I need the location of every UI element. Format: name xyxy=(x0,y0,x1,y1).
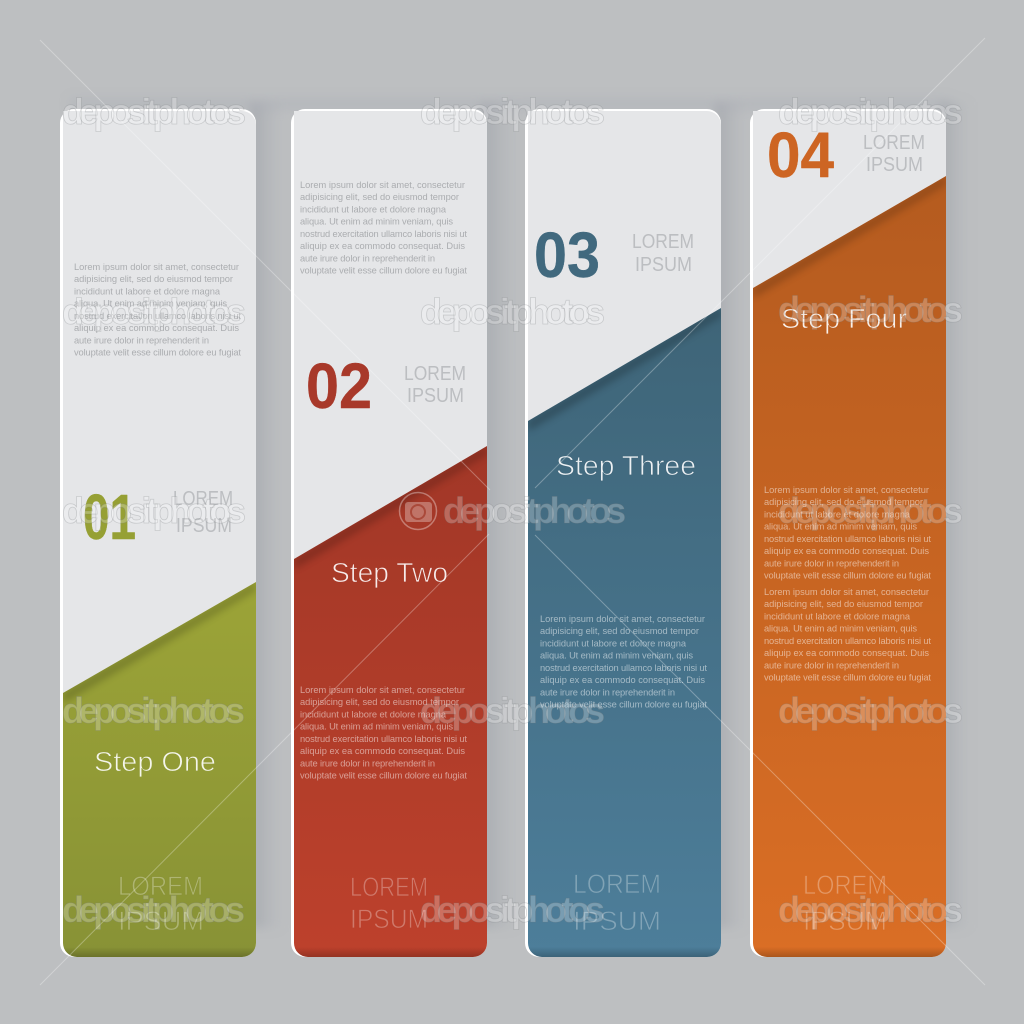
text block: step three: nostrud exercitation ullamco laboris nisi ut xyxy=(540,663,707,673)
footer label: step three xyxy=(573,869,661,936)
label: lorem ipsum: LOREM xyxy=(173,488,233,510)
watermark: depositphotos xyxy=(62,490,246,531)
text block: step four upper: voluptate velit esse cillum dolore eu fugiat xyxy=(764,571,931,581)
watermark: depositphotos xyxy=(778,490,963,531)
label: lorem ipsum: LOREM xyxy=(632,231,694,253)
panel: step four xyxy=(750,109,946,957)
icon: watermark camera xyxy=(400,492,436,530)
text block: step two bottom: incididunt ut labore et dolore magna xyxy=(300,710,447,720)
text block: step two bottom: Lorem ipsum dolor sit amet, consectetur xyxy=(300,685,465,695)
text block: step two bottom: voluptate velit esse cillum dolore eu fugiat xyxy=(300,771,467,781)
label: lorem ipsum: IPSUM xyxy=(407,385,464,407)
label: lorem ipsum: IPSUM xyxy=(635,254,692,276)
footer label: step three: LOREM xyxy=(573,869,661,899)
heading: step three: Step Three xyxy=(556,450,696,481)
text block: step one: aute irure dolor in reprehenderit in xyxy=(74,336,209,346)
text block: step three: aute irure dolor in reprehenderit in xyxy=(540,688,675,698)
footer label: step one xyxy=(118,871,204,936)
text block: step four lower: aute irure dolor in reprehenderit in xyxy=(764,660,899,670)
text block: step four upper: aliqua. Ut enim ad minim veniam, quis xyxy=(764,522,917,532)
text block: step four lower: adipisicing elit, sed do eiusmod tempor xyxy=(764,599,923,609)
text block: step two top: aliqua. Ut enim ad minim veniam, quis xyxy=(300,217,453,227)
text block: step four upper: aliquip ex ea commodo consequat. Duis xyxy=(764,546,929,556)
text block: step two top: voluptate velit esse cillum dolore eu fugiat xyxy=(300,266,467,276)
footer label: step two: LOREM xyxy=(350,872,428,902)
text block: step three: Lorem ipsum dolor sit amet, consectetur xyxy=(540,614,705,624)
text block: step two top: incididunt ut labore et dolore magna xyxy=(300,204,447,214)
number 03: 03 xyxy=(534,219,600,291)
watermark xyxy=(62,91,963,930)
footer label: step four: IPSUM xyxy=(803,906,887,936)
text block: step four lower: aliqua. Ut enim ad minim veniam, quis xyxy=(764,624,917,634)
text block: step three: aliquip ex ea commodo consequat. Duis xyxy=(540,675,705,685)
footer label: step four: LOREM xyxy=(803,870,887,900)
label: lorem ipsum: LOREM xyxy=(863,132,925,154)
watermark: depositphotos xyxy=(778,91,963,132)
text block: step three: adipisicing elit, sed do eiusmod tempor xyxy=(540,626,699,636)
heading: step one: Step One xyxy=(94,746,216,777)
number 02: 02 xyxy=(306,350,372,422)
label: lorem ipsum: LOREM xyxy=(404,363,466,385)
text block: step four upper: Lorem ipsum dolor sit amet, consectetur xyxy=(764,485,929,495)
text block: step two top: adipisicing elit, sed do eiusmod tempor xyxy=(300,192,459,202)
text block: step three: aliqua. Ut enim ad minim veniam, quis xyxy=(540,651,693,661)
panel: step two xyxy=(291,109,487,957)
text block: step four lower: Lorem ipsum dolor sit amet, consectetur xyxy=(764,587,929,597)
watermark: depositphotos xyxy=(62,690,245,731)
footer label: step two xyxy=(350,872,428,934)
text block: step one: adipisicing elit, sed do eiusmod tempor xyxy=(74,274,233,284)
text block: step two top: aliquip ex ea commodo consequat. Duis xyxy=(300,241,465,251)
watermark: depositphotos xyxy=(420,690,605,731)
colour block: step three xyxy=(525,300,721,957)
text block: step four upper: adipisicing elit, sed do eiusmod tempor xyxy=(764,497,923,507)
watermark: depositphotos xyxy=(420,889,605,930)
watermark: depositphotos xyxy=(62,889,245,930)
text block: step four lower: aliquip ex ea commodo consequat. Duis xyxy=(764,648,929,658)
heading: step two: Step Two xyxy=(331,557,448,588)
label: lorem ipsum xyxy=(632,231,694,276)
text block: step two bottom: nostrud exercitation ullamco laboris nisi ut xyxy=(300,734,467,744)
label: lorem ipsum: IPSUM xyxy=(176,515,232,537)
number 01: 01 xyxy=(83,481,136,553)
colour block: step two xyxy=(291,440,487,957)
text block: step four lower: voluptate velit esse cillum dolore eu fugiat xyxy=(764,673,931,683)
text block: step one: incididunt ut labore et dolore magna xyxy=(74,286,221,296)
label: lorem ipsum xyxy=(863,132,925,176)
text block: step two top: nostrud exercitation ullamco laboris nisi ut xyxy=(300,229,467,239)
text block: step two bottom: aute irure dolor in reprehenderit in xyxy=(300,758,435,768)
footer label: step three: IPSUM xyxy=(573,906,661,936)
label: lorem ipsum xyxy=(404,363,466,407)
text block: step two top: Lorem ipsum dolor sit amet, consectetur xyxy=(300,180,465,190)
footer label: step four xyxy=(803,870,887,936)
panel: step one xyxy=(60,109,256,957)
text block: step two bottom: adipisicing elit, sed do eiusmod tempor xyxy=(300,697,459,707)
watermark: depositphotos xyxy=(778,690,963,731)
panel: step three xyxy=(525,109,721,957)
watermark: depositphotos xyxy=(778,289,963,330)
number 04: 04 xyxy=(767,119,834,191)
colour block: step one xyxy=(60,580,256,957)
text block: step four upper: aute irure dolor in reprehenderit in xyxy=(764,558,899,568)
text block: step two bottom: aliquip ex ea commodo consequat. Duis xyxy=(300,746,465,756)
text block: step four upper: incididunt ut labore et dolore magna xyxy=(764,510,911,520)
text block: step two top: aute irure dolor in reprehenderit in xyxy=(300,254,435,264)
text block: step two bottom: aliqua. Ut enim ad minim veniam, quis xyxy=(300,722,453,732)
watermark: depositphotos xyxy=(62,291,246,332)
watermark: depositphotos xyxy=(420,91,605,132)
text block: step one: voluptate velit esse cillum dolore eu fugiat xyxy=(74,348,241,358)
text block: step three: incididunt ut labore et dolore magna xyxy=(540,638,687,648)
footer label: step one: IPSUM xyxy=(118,906,204,936)
label: lorem ipsum xyxy=(173,488,233,537)
text block: step four lower: incididunt ut labore et dolore magna xyxy=(764,612,911,622)
text block: step four upper: nostrud exercitation ullamco laboris nisi ut xyxy=(764,534,931,544)
text block: step one: aliquip ex ea commodo consequat. Duis xyxy=(74,323,239,333)
heading: step four: Step Four xyxy=(781,303,907,334)
label: lorem ipsum: IPSUM xyxy=(866,154,923,176)
text block: step one: aliqua. Ut enim ad minim veniam, quis xyxy=(74,299,227,309)
footer label: step one: LOREM xyxy=(118,871,203,901)
watermark: depositphotos xyxy=(420,291,605,332)
footer label: step two: IPSUM xyxy=(350,904,428,934)
text block: step three: voluptate velit esse cillum dolore eu fugiat xyxy=(540,700,707,710)
watermark: depositphotos xyxy=(443,490,626,531)
watermark: depositphotos xyxy=(778,889,963,930)
text block: step one: Lorem ipsum dolor sit amet, consectetur xyxy=(74,262,239,272)
text block: step four lower: nostrud exercitation ullamco laboris nisi ut xyxy=(764,636,931,646)
watermark: depositphotos xyxy=(62,91,246,132)
colour block: step four xyxy=(750,170,946,957)
text block: step one: nostrud exercitation ullamco laboris nisi ut xyxy=(74,311,241,321)
